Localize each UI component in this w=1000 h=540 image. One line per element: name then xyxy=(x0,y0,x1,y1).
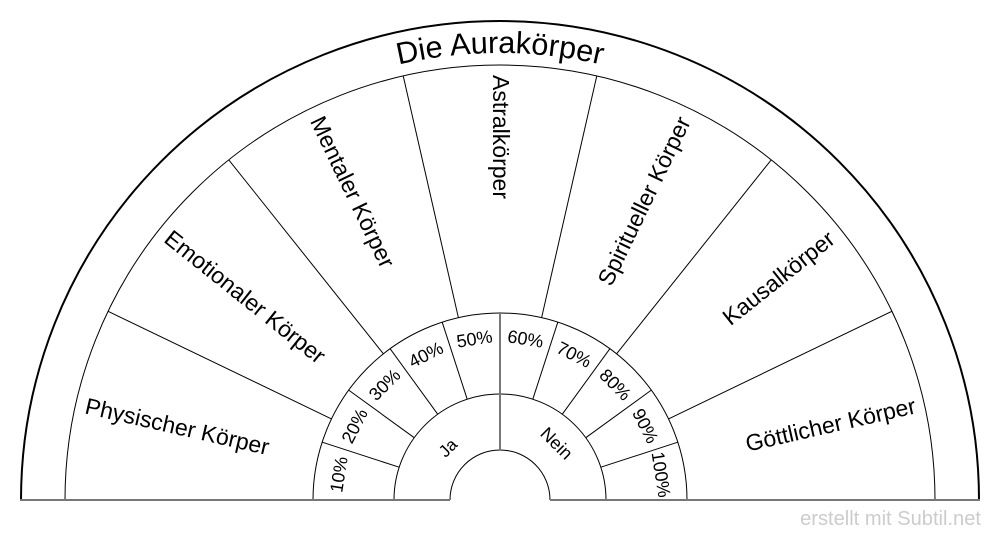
percent ring arc xyxy=(313,313,687,500)
label: Astralkörper: Astralkörper xyxy=(488,75,514,199)
90%: 90% xyxy=(628,405,662,447)
20%: 20% xyxy=(338,405,372,447)
body labels xyxy=(83,75,919,460)
70%: 70% xyxy=(553,338,595,372)
no label: Nein xyxy=(536,423,577,464)
percent labels xyxy=(326,326,674,499)
label: Physischer Körper: Physischer Körper xyxy=(83,393,272,460)
footer credit: erstellt mit Subtil.net xyxy=(800,508,981,530)
label: Emotionaler Körper: Emotionaler Körper xyxy=(160,225,331,369)
40%: 40% xyxy=(405,338,447,372)
base line xyxy=(20,499,450,501)
center divider xyxy=(499,313,501,450)
30%: 30% xyxy=(365,365,405,405)
label: Spiritueller Körper: Spiritueller Körper xyxy=(592,112,696,289)
80%: 80% xyxy=(595,365,635,405)
base line right xyxy=(550,499,980,501)
yes/no ring arc xyxy=(394,394,606,500)
50%: 50% xyxy=(455,326,494,352)
100%: 100% xyxy=(648,450,674,499)
title: Die Aurakörper xyxy=(396,31,604,64)
label: Mentaler Körper: Mentaler Körper xyxy=(305,112,400,272)
body sector spokes xyxy=(108,76,892,419)
label: Kausalkörper: Kausalkörper xyxy=(717,225,840,330)
yes label: Ja xyxy=(435,435,461,461)
10%: 10% xyxy=(326,455,352,494)
label: Göttlicher Körper: Göttlicher Körper xyxy=(743,392,919,457)
percent sector spokes xyxy=(322,322,678,467)
inner arc xyxy=(450,450,550,500)
title ring arc xyxy=(65,65,935,500)
60%: 60% xyxy=(506,326,545,352)
